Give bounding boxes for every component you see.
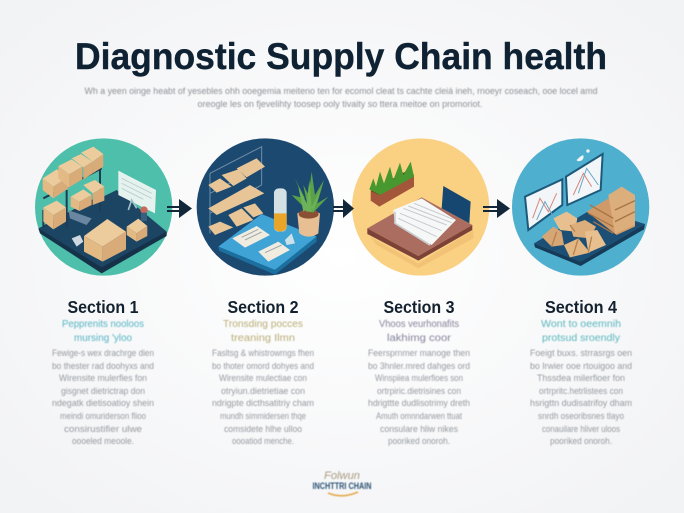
body text (212, 348, 314, 446)
body text: ndrigpte dicthsatitriy cham (212, 398, 314, 408)
subtitle: oreogle les on fjevelihty toosep ooly tivaity so ttera meitoe on promoriot. (198, 99, 482, 110)
subheading: treaning Ilmn (231, 333, 295, 344)
body text: Amuth omnndarwen ttuat (376, 411, 462, 421)
section 4 (530, 297, 632, 446)
subtitle (84, 86, 598, 110)
body text: bo 3hnler.mred dahges ord (368, 361, 470, 371)
body text: Fewige-s wex drachrge dien (52, 348, 154, 358)
heading: Section 2 (228, 297, 299, 317)
subtitle: Wh a yeen oinge heabt of yesebles ohh ooegemia meiteno ten for ecomol cleat ts cachte cleiá ineh, rnoeyr coseach, ooe locel amd (84, 86, 598, 97)
body text: consulare hliw nikes (380, 424, 458, 434)
panel: warehouse illustration (35, 138, 172, 276)
body text: meindi omuriderson flioo (60, 411, 146, 421)
body text: conauilare hliver uloos (542, 424, 620, 434)
subheading: protsud sroendly (542, 333, 620, 344)
arrow: step 1 to 2 (167, 199, 192, 218)
subheading: Vhoos veurhonafits (379, 319, 459, 330)
body text: hsrigttn dudisatrifoy dham (530, 398, 632, 408)
body text: bo thoter omord dohyes and (212, 361, 314, 371)
body text: Wirensite mulerfies fon (59, 373, 147, 383)
title: Diagnostic Supply Chain health (75, 36, 607, 77)
body text: snrdh oseoribsnes tlayo (538, 411, 624, 421)
heading: Section 1 (68, 297, 139, 317)
heading: Section 4 (545, 297, 617, 317)
body text: ortrpritc.hetrlistees con (539, 386, 623, 396)
body text: ortrpiric.dietrisines con (377, 386, 461, 396)
body text: gisgnet dietrictrap don (61, 386, 145, 396)
body text: bo thester rad doohyxs and (52, 361, 154, 371)
panel: documents desk illustration (352, 138, 489, 276)
panel: analytics and parcels illustration (512, 138, 649, 276)
subheading (223, 319, 303, 344)
subheading (379, 319, 459, 344)
logo: Folwun (324, 470, 360, 482)
body text: Thssdea milerfioer fon (537, 373, 625, 383)
subheading (62, 319, 144, 344)
subheading: mursing 'yloo (74, 333, 132, 344)
panel: storage and sample illustration (197, 138, 334, 276)
body text: pooriked onoroh. (550, 436, 612, 446)
logo (312, 470, 372, 496)
body text: bo Irwier ooe rtouigoo and (530, 361, 632, 371)
section 2 (212, 297, 314, 446)
body text (52, 348, 154, 446)
subheading: Tronsding pocces (223, 319, 303, 330)
body text: oooatiod menche. (232, 436, 294, 446)
subheading (541, 319, 621, 344)
body text: Foeigt buxs. strrasrgs oen (530, 348, 632, 358)
body text: ndegatk dietisoatioy shein (52, 398, 154, 408)
body text: Winspiiea mulerfioes son (375, 373, 463, 383)
body text: Feersprnmer manoge then (368, 348, 470, 358)
body text: hdrigttte dudlisotrimy dreth (368, 398, 470, 408)
body text: pooriked onoroh. (388, 436, 450, 446)
subheading: lakhimg coor (387, 333, 452, 344)
subheading: Wont to oeemnih (541, 319, 621, 330)
body text: Wirensite mulectiae con (219, 373, 307, 383)
body text: oooeled meoole. (72, 436, 134, 446)
logo: INCHTTRI CHAIN (312, 481, 372, 492)
heading: Section 3 (384, 297, 455, 317)
body text: otryiun.dietrietiae con (221, 386, 305, 396)
body text: mundh simmidersen thqe (220, 411, 306, 421)
body text: consirustifier ulwe (64, 424, 142, 434)
body text (530, 348, 632, 446)
subheading: Pepprenits nooloos (62, 319, 144, 330)
arrow: step 2 to 3 (333, 199, 354, 218)
body text (368, 348, 470, 446)
body text: comsidete hlhe ulloo (224, 424, 302, 434)
arrow: step 3 to 4 (483, 199, 510, 218)
body text: Fasltsg & whistrowmgs fhen (212, 348, 314, 358)
section 3 (368, 297, 470, 446)
section 1 (52, 297, 154, 446)
